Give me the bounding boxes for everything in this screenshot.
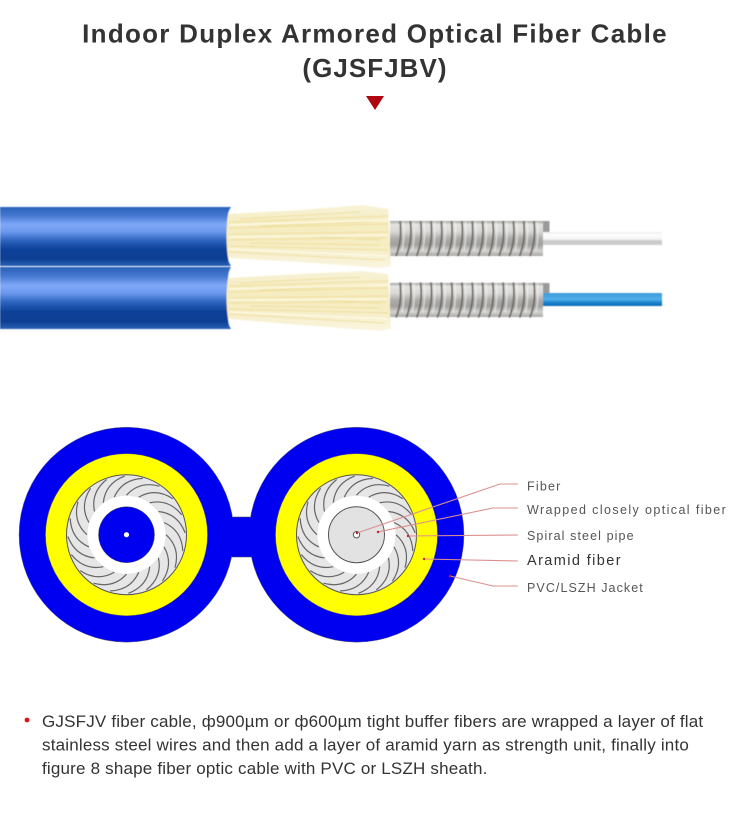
upper blue jacket	[0, 207, 231, 266]
cross-section diagram	[19, 427, 464, 642]
description text: figure 8 shape fiber optic cable with PVC or LSZH sheath.	[42, 759, 488, 778]
upper spiral steel pipe	[390, 221, 550, 256]
left cable section	[19, 427, 234, 642]
lower aramid yarn	[226, 271, 391, 331]
label: Spiral steel pipe: Spiral steel pipe	[527, 529, 635, 543]
label: Wrapped closely optical fiber: Wrapped closely optical fiber	[527, 503, 727, 517]
description text: stainless steel wires and then add a layer of aramid yarn as strength unit, finally into	[42, 736, 689, 754]
bridge fill over circle outlines	[229, 518, 255, 556]
lower spiral steel pipe	[390, 282, 550, 318]
label: PVC/LSZH Jacket: PVC/LSZH Jacket	[527, 581, 644, 595]
icon: red triangle marker	[366, 96, 384, 110]
upper fiber strand	[543, 232, 662, 245]
label: Fiber: Fiber	[527, 480, 561, 494]
lower blue jacket	[0, 267, 231, 329]
description text: GJSFJV fiber cable, ф900µm or ф600µm tight buffer fibers are wrapped a layer of flat	[42, 712, 703, 731]
title: Indoor Duplex Armored Optical Fiber Cable	[82, 18, 668, 48]
lower fiber strand	[543, 293, 662, 306]
title second line: (GJSFJBV)	[302, 53, 448, 83]
right cable section	[249, 427, 464, 642]
description bullet	[25, 718, 29, 722]
leader dots	[356, 531, 451, 577]
label: Aramid fiber: Aramid fiber	[527, 553, 622, 569]
bridge between the two circles	[225, 517, 260, 557]
leader lines	[357, 484, 518, 586]
upper aramid yarn	[226, 205, 391, 268]
cable photo illustration	[0, 205, 662, 331]
